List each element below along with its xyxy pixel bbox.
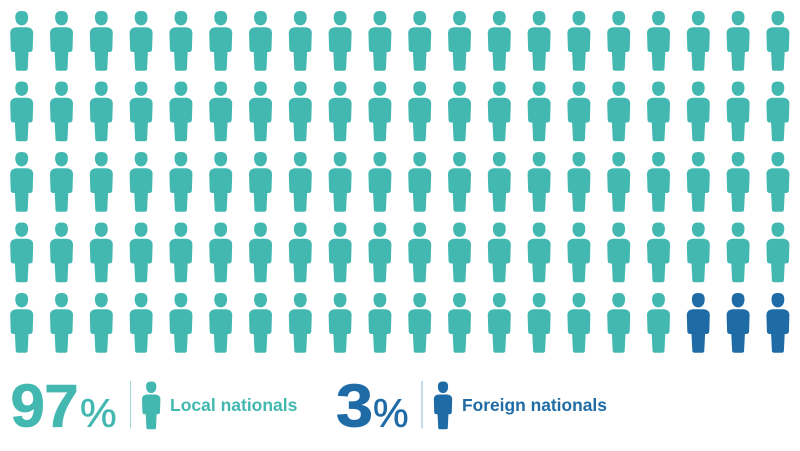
divider xyxy=(130,381,131,428)
row 5: foreign nationals xyxy=(687,293,789,353)
percent sign: % xyxy=(80,391,117,436)
legend: foreign nationals xyxy=(336,373,607,440)
legend: local nationals xyxy=(10,372,298,439)
stat: 3 percent: 3 xyxy=(336,373,373,440)
stat: 97 percent: 97 xyxy=(10,372,78,439)
row 4 of people xyxy=(10,222,789,282)
divider xyxy=(422,381,423,428)
row 1 of people xyxy=(10,11,789,71)
icon: foreign person xyxy=(434,382,452,429)
icon: local person xyxy=(142,382,160,429)
label: foreign nationals: Foreign nationals xyxy=(462,395,607,415)
label: local nationals: Local nationals xyxy=(170,395,298,415)
row 3 of people xyxy=(10,152,789,212)
row 5: local nationals xyxy=(10,293,670,353)
percent sign: % xyxy=(373,392,409,436)
row 2 of people xyxy=(10,82,789,141)
pictogram grid: 100 people xyxy=(10,11,789,353)
